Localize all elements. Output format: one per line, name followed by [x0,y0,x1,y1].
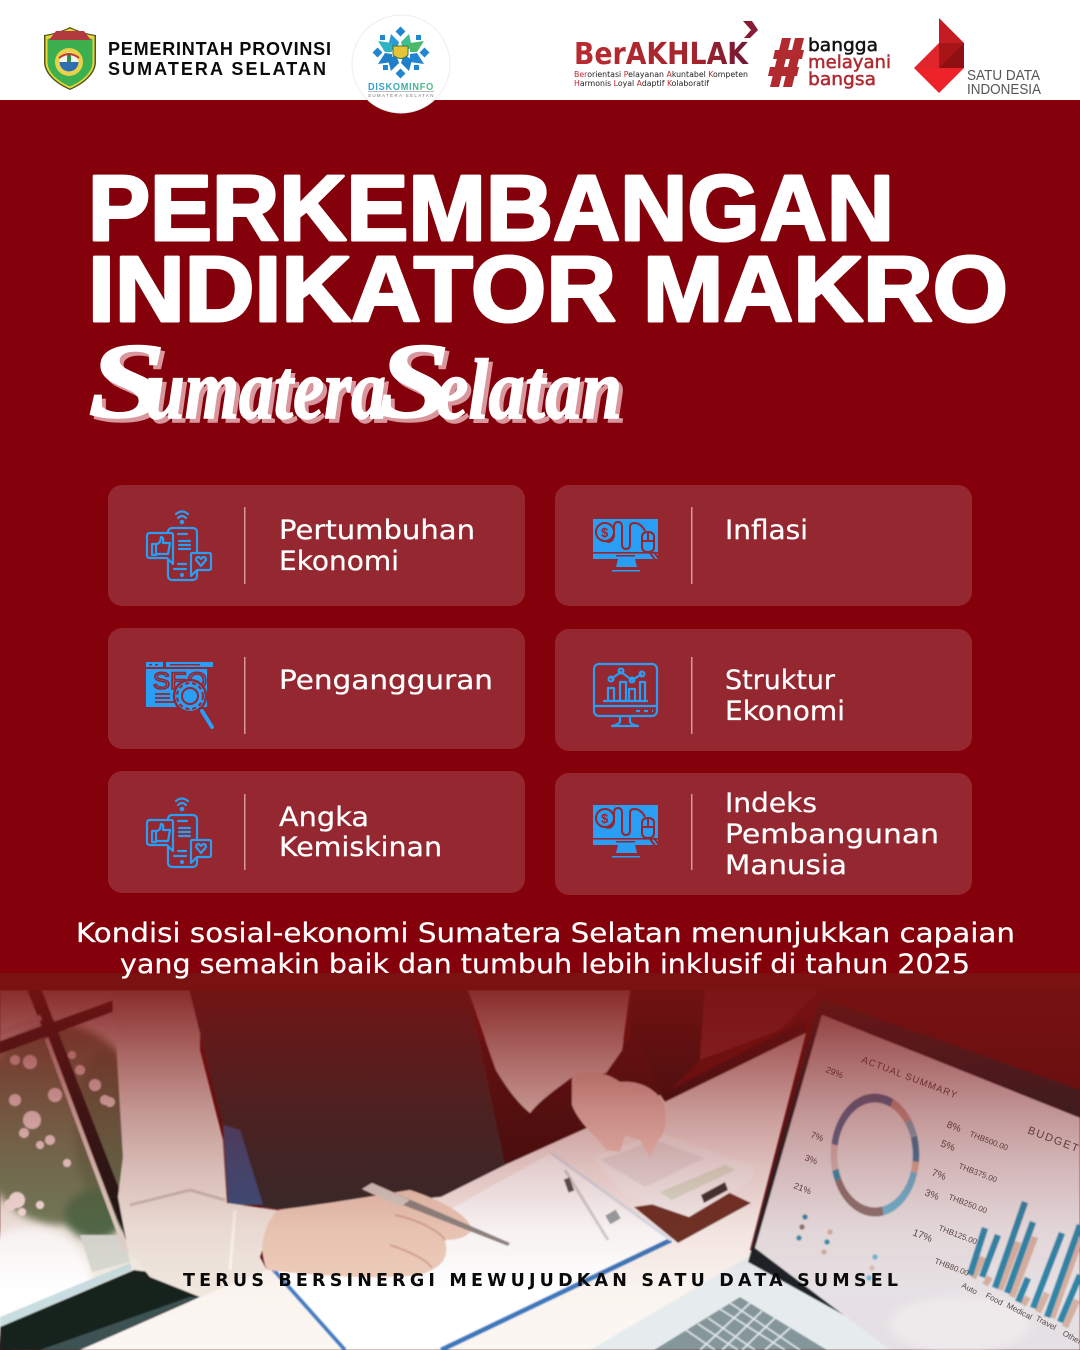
panel: Pertumbuhan Ekonomi [108,485,525,606]
subtitle script: Sumatera Selatan: S [378,322,450,441]
clipboard [275,1153,671,1350]
icon: monitor with dollar and mouse [593,519,659,572]
panel: Pengangguran [108,628,525,749]
caption text [76,918,1015,980]
icon: monitor with dollar and mouse: $ [601,811,609,826]
subtitle script: Sumatera Selatan: umatera [146,341,386,437]
icon: phone with thumbs up [147,512,211,580]
panel: Indeks Pembangunan Manusia [555,773,972,895]
screen labels: THB250.00 [947,1192,989,1216]
panel: Angka Kemiskinan [108,771,525,893]
header band [0,0,1080,113]
label [725,788,939,881]
label: Kemiskinan [279,832,442,863]
logo: Diskominfo: DISKOMINFO [368,82,434,93]
screen labels: ACTUAL SUMMARY [860,1055,959,1101]
caption text: yang semakin baik dan tumbuh lebih inklusif di tahun 2025 [120,949,970,980]
subtitle script: Sumatera Selatan: elatan [436,341,622,437]
logo: Diskominfo [352,15,450,113]
screen labels: Food [984,1291,1004,1307]
divider [691,507,692,584]
divider [691,657,692,734]
laptop bezel and base [590,1257,907,1350]
heading: Pemerintah Provinsi Sumatera Selatan: PEMERINTAH PROVINSI [108,39,331,59]
logo: Satu Data Indonesia: SATU DATA [967,67,1040,84]
label: Indeks [725,788,817,819]
icon: monitor with dollar and mouse: $ [601,525,609,540]
icon: phone with thumbs up [147,798,211,867]
divider [244,657,246,734]
screen labels: 7% [930,1168,947,1183]
maroon overlay [0,990,1080,1256]
label [279,802,442,863]
label: Struktur [725,665,836,696]
title: PERKEMBANGAN [88,156,894,260]
label: Pengangguran [279,665,493,696]
label: Ekonomi [725,696,845,727]
label: Pertumbuhan [279,515,475,546]
icon: monitor with bar chart [594,664,657,726]
logo: Satu Data Indonesia: INDONESIA [967,81,1041,98]
heading: Pemerintah Provinsi Sumatera Selatan: SUMATERA SELATAN [108,59,326,79]
logo: BerAKHLAK: Harmonis Loyal Adaptif Kolaboratif [574,79,709,88]
screen labels: 5% [939,1139,956,1154]
screen labels: Auto [960,1281,979,1297]
logo: bangga melayani bangsa: melayani [808,52,891,73]
screen labels [792,1055,1080,1346]
panel: Struktur Ekonomi [555,629,972,751]
logo: BerAKHLAK: Berorientasi Pelayanan Akuntabel Kompeten [574,70,748,79]
screen labels: 3% [923,1188,940,1203]
screen labels: 7% [809,1130,825,1144]
label [279,515,475,577]
logo: Diskominfo: SUMATERA SELATAN [368,93,434,98]
screen labels: THB500.00 [968,1129,1010,1153]
screen legend dots [796,1214,878,1281]
left sleeve [116,1046,278,1298]
person: dark vest [189,990,505,1210]
background interior [630,990,705,1100]
logo: bangga melayani bangsa: bangga [808,35,878,56]
tagline: TERUS BERSINERGI MEWUJUDKAN SATU DATA SUMSEL [183,1271,898,1291]
subtitle script: Sumatera Selatan [88,322,622,441]
panel: Inflasi [555,485,972,606]
screen labels: THB375.00 [957,1161,999,1185]
logo: bangga melayani bangsa: bangsa [808,69,876,90]
divider [244,794,246,870]
screen labels: 29% [824,1065,845,1080]
screen labels: 8% [945,1120,962,1135]
label [725,665,845,727]
label: Manusia [725,850,847,881]
desk [80,1032,806,1350]
label: Angka [279,802,369,833]
screen labels: THB80.00 [933,1256,971,1278]
subtitle script: Sumatera Selatan: S [88,322,166,441]
label: Pembangunan [725,819,939,850]
pen [394,1192,510,1246]
window [0,990,200,1330]
logo: Satu Data Indonesia [914,18,1041,98]
photo: hands working at a desk with a laptop [0,973,1080,1350]
title: INDIKATOR MAKRO [88,237,1008,341]
calculator [634,1193,751,1243]
screen labels: Medical [1005,1301,1034,1322]
label: Inflasi [725,515,808,546]
screen chart bars [970,1202,1080,1327]
logo: BerAKHLAK [574,21,758,88]
screen labels: 3% [803,1153,819,1167]
logo: provincial crest [44,27,96,90]
label: Ekonomi [279,546,399,577]
screen labels: 21% [792,1181,813,1196]
screen labels: 17% [911,1228,934,1245]
screen donut [831,1094,919,1216]
divider [691,794,692,870]
heading: Pemerintah Provinsi Sumatera Selatan [108,39,331,79]
left hand [262,1190,472,1277]
icon: monitor with dollar and mouse [593,805,659,858]
title [88,156,1008,341]
logo: bangga melayani bangsa [768,35,891,90]
icon: SEO gear with magnifier [146,662,213,727]
logo: BerAKHLAK: BerAKHLAK [574,37,750,72]
divider [244,507,246,584]
right arm [468,990,630,1113]
icon: SEO gear with magnifier: SEO [153,668,207,695]
screen labels: Travel [1034,1314,1058,1332]
screen labels: THB125.00 [937,1223,979,1247]
caption text: Kondisi sosial-ekonomi Sumatera Selatan menunjukkan capaian [76,918,1015,949]
